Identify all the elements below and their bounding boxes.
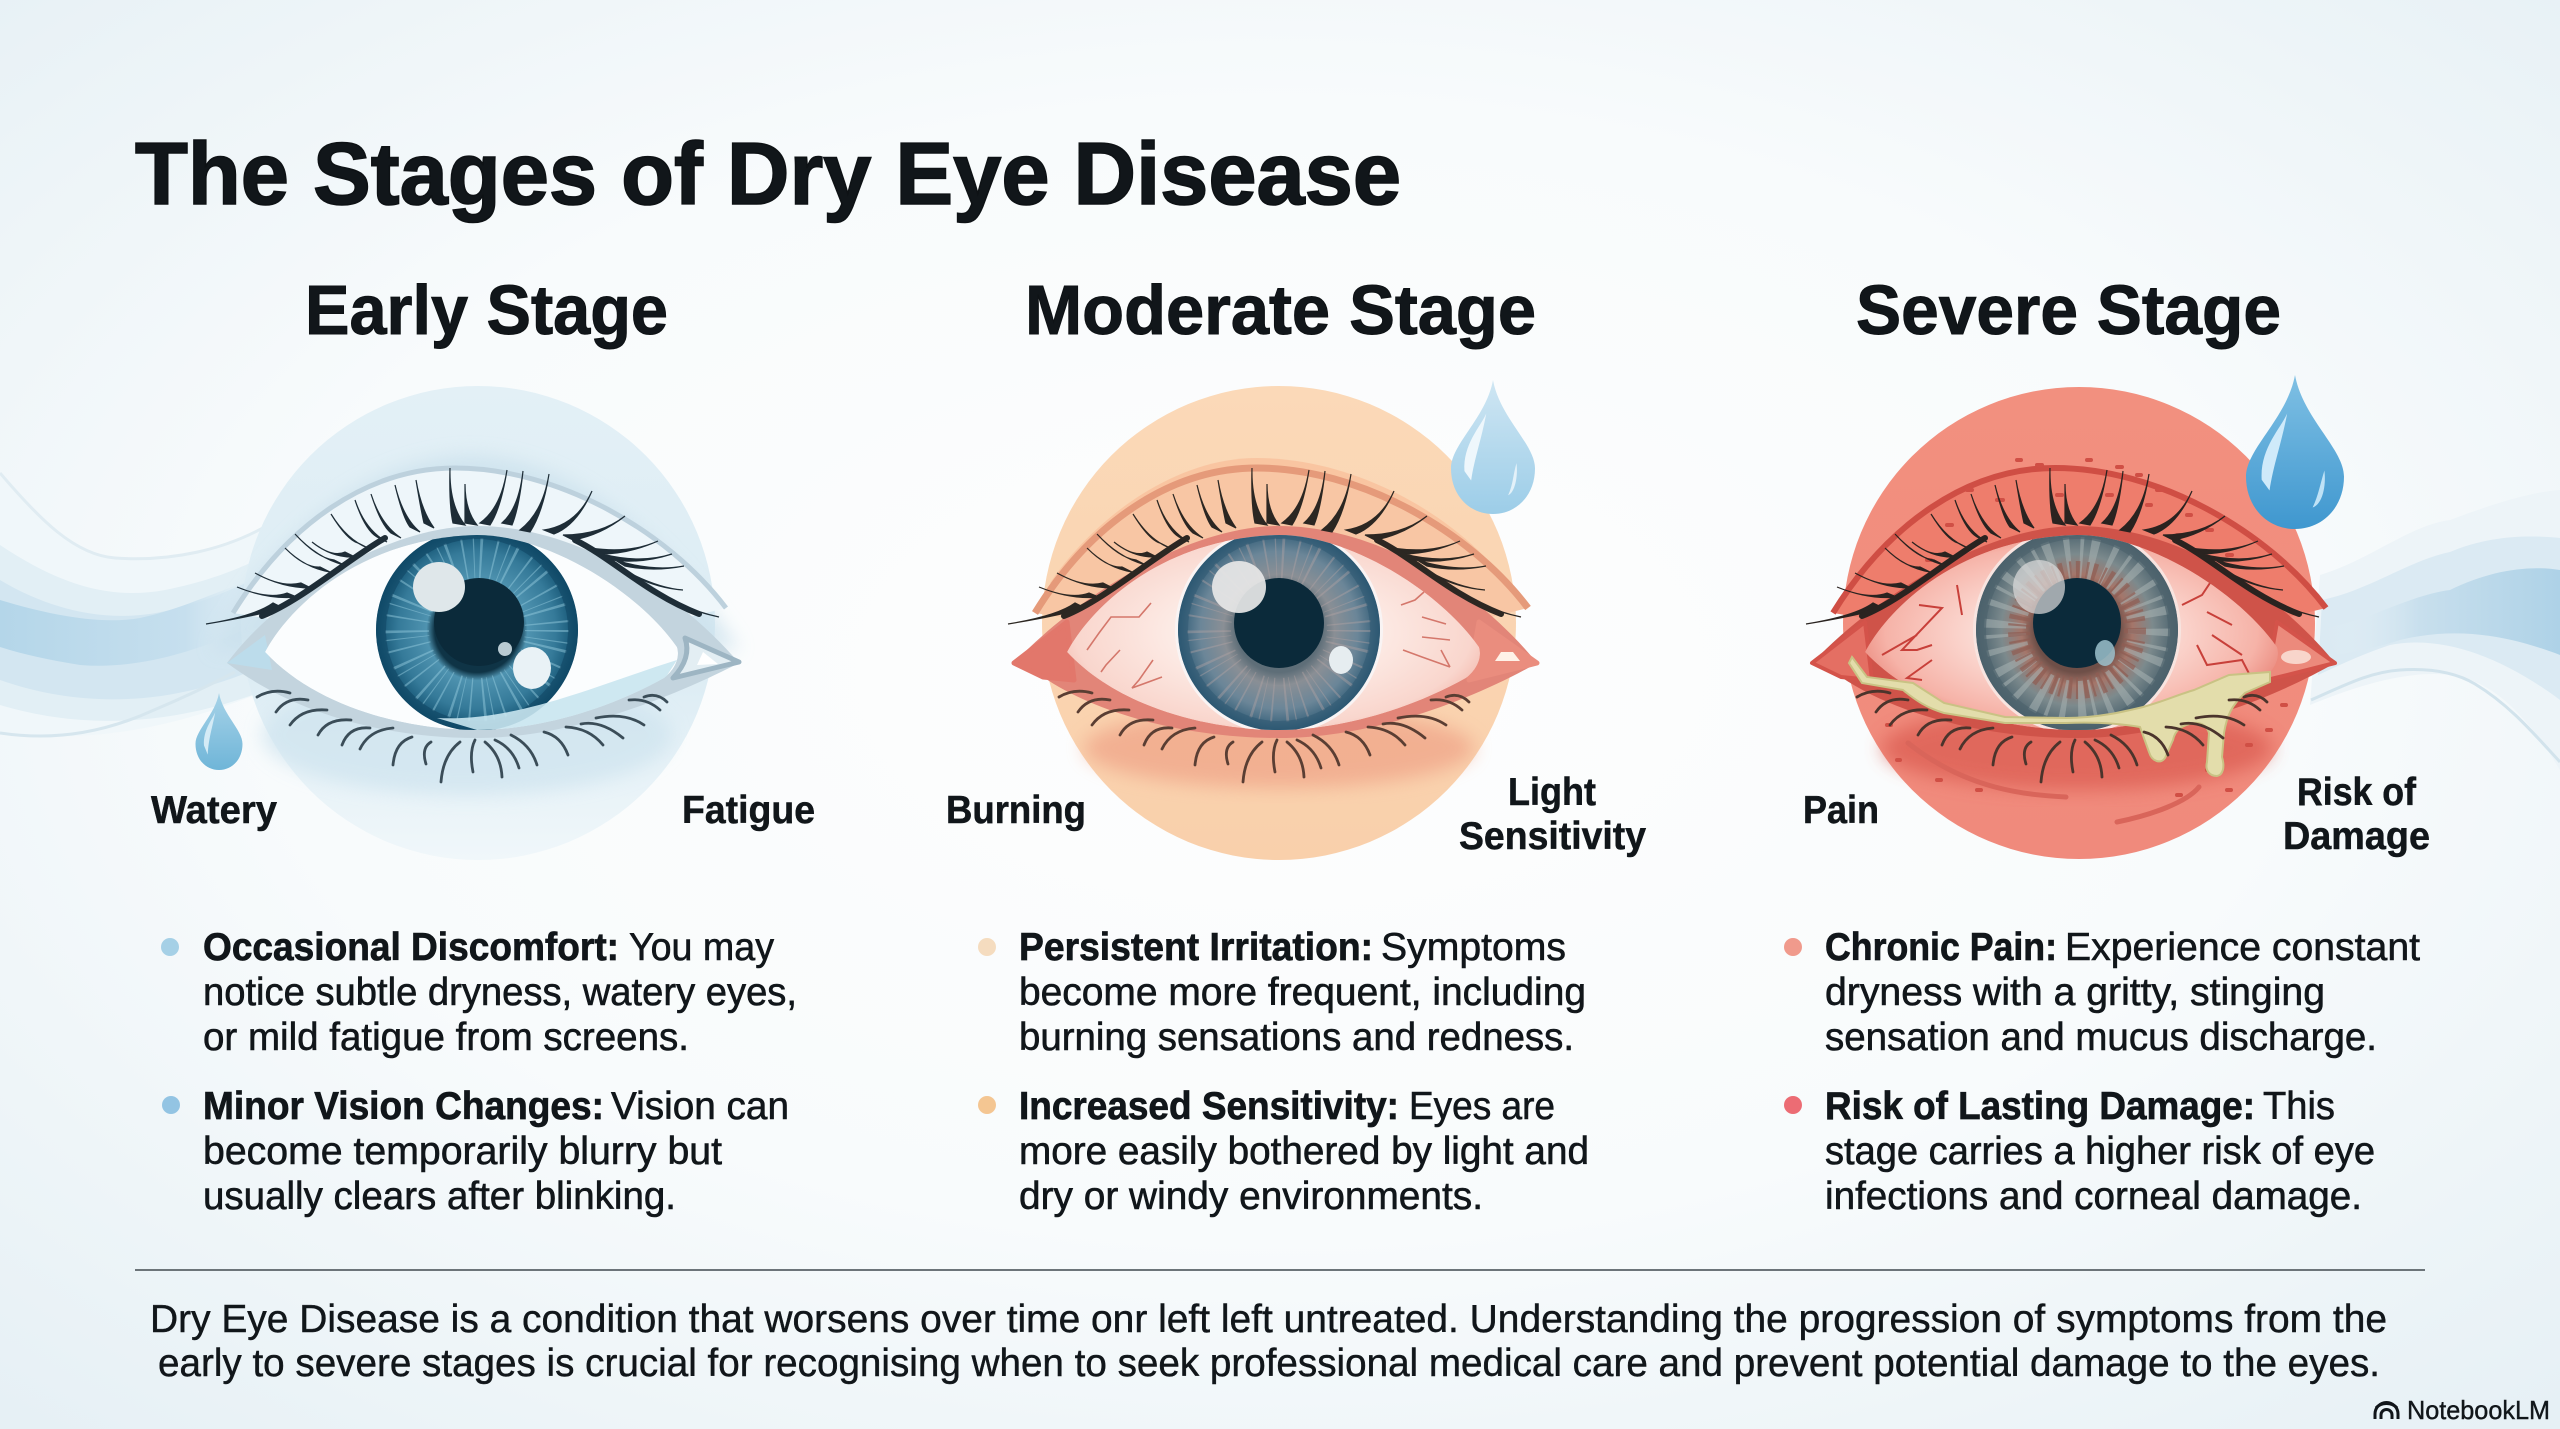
bullet: persistent irritation: become more frequent, including [1019, 971, 1586, 1014]
blood vessels [1882, 580, 2255, 685]
footer summary: Dry Eye Disease is a condition that worsens over time onr left left untreated. Understanding the progression of symptoms from the [150, 1298, 2387, 1341]
bullet: chronic pain [1784, 926, 2420, 1059]
icon: early stage eye [206, 455, 739, 795]
notebooklm watermark: NotebookLM [2407, 1395, 2550, 1425]
bullet: minor vision changes: become temporarily blurry but [203, 1130, 722, 1173]
bullet: chronic pain: sensation and mucus discharge. [1825, 1016, 2377, 1059]
bullet: risk of lasting damage [1784, 1085, 2375, 1218]
iris [376, 529, 578, 731]
heading: moderate stage: Moderate Stage [1025, 271, 1536, 349]
title: The Stages of Dry Eye Disease [135, 124, 1401, 223]
symptom label: risk of damage: Damage [2283, 815, 2430, 858]
tear film [437, 660, 677, 730]
lower lashes [1059, 691, 1469, 782]
bullet: persistent irritation [978, 926, 1586, 1059]
bullet: chronic pain: Experience constant [2065, 926, 2420, 969]
right wave decoration [2310, 490, 2560, 770]
symptom label: pain: Pain [1803, 789, 1879, 832]
heading: early stage: Early Stage [305, 271, 668, 349]
symptom label: light sensitivity: Sensitivity [1459, 815, 1646, 858]
bullet: persistent irritation: Symptoms [1381, 926, 1566, 969]
icon: small tear drop [196, 693, 242, 770]
footer summary: early to severe stages is crucial for recognising when to seek professional medical care and prevent potential damage to the eyes. [158, 1342, 2380, 1385]
halo: early stage [241, 386, 715, 860]
upper lashes [206, 468, 719, 624]
bullet: increased sensitivity: Increased Sensitivity: [1019, 1085, 1399, 1128]
symptom label: light sensitivity: Light [1508, 771, 1596, 814]
bullet: minor vision changes: Minor Vision Changes: [203, 1085, 604, 1128]
bullet: occasional discomfort: notice subtle dryness, watery eyes, [203, 971, 797, 1014]
symptom label: watery: Watery [151, 789, 277, 832]
bullet: increased sensitivity: dry or windy environments. [1019, 1175, 1483, 1218]
lower lid fold [1908, 743, 2199, 822]
heading: severe stage: Severe Stage [1856, 271, 2281, 349]
bullet: persistent irritation: Persistent Irritation: [1019, 926, 1373, 969]
bullet: increased sensitivity: Eyes are [1409, 1085, 1555, 1128]
pupil [2033, 578, 2121, 668]
mucus discharge [1849, 657, 2270, 776]
bullet: occasional discomfort: You may [629, 926, 774, 969]
halo: severe stage [1843, 387, 2315, 859]
symptom label: risk of damage: Risk of [2297, 771, 2417, 814]
icon: tear drop severe [2246, 375, 2344, 529]
redness spots [1887, 460, 2286, 795]
bullet: risk of lasting damage: stage carries a higher risk of eye [1825, 1130, 2375, 1173]
footer summary [150, 1298, 2387, 1385]
lower lashes [257, 691, 667, 782]
bullet: occasional discomfort: Occasional Discomfort: [203, 926, 619, 969]
bullet: occasional discomfort: or mild fatigue from screens. [203, 1016, 689, 1059]
bullet: risk of lasting damage: Risk of Lasting Damage: [1825, 1085, 2255, 1128]
pupil [1234, 578, 1324, 668]
bullet: increased sensitivity: more easily bothered by light and [1019, 1130, 1589, 1173]
bullet: risk of lasting damage: infections and corneal damage. [1825, 1175, 2362, 1218]
bullet: chronic pain: Chronic Pain: [1825, 926, 2057, 969]
symptom label: risk of damage [2283, 771, 2430, 858]
icon: moderate stage eye [1008, 458, 1537, 788]
iris [1178, 529, 1380, 731]
bullet: chronic pain: dryness with a gritty, stinging [1825, 971, 2325, 1014]
symptom label: burning: Burning [946, 789, 1086, 832]
iris [1976, 529, 2178, 731]
blood vessels [1087, 592, 1450, 688]
bullet: occasional discomfort [161, 926, 797, 1059]
symptom label: light sensitivity [1459, 771, 1646, 858]
left wave decoration [0, 473, 290, 736]
bullet: minor vision changes [162, 1085, 789, 1218]
halo: moderate stage [1042, 386, 1516, 860]
upper lashes [1806, 468, 2319, 624]
icon: tear drop moderate [1451, 380, 1535, 514]
bullet: minor vision changes: Vision can [611, 1085, 789, 1128]
bullet: persistent irritation: burning sensations and redness. [1019, 1016, 1574, 1059]
pupil [434, 578, 524, 666]
upper lashes [1008, 468, 1521, 624]
bullet: risk of lasting damage: This [2263, 1085, 2335, 1128]
symptom label: fatigue: Fatigue [682, 789, 815, 832]
lower lashes [1857, 691, 2267, 782]
icon: severe stage eye [1806, 460, 2335, 822]
bullet: increased sensitivity [978, 1085, 1589, 1218]
bullet: minor vision changes: usually clears after blinking. [203, 1175, 676, 1218]
